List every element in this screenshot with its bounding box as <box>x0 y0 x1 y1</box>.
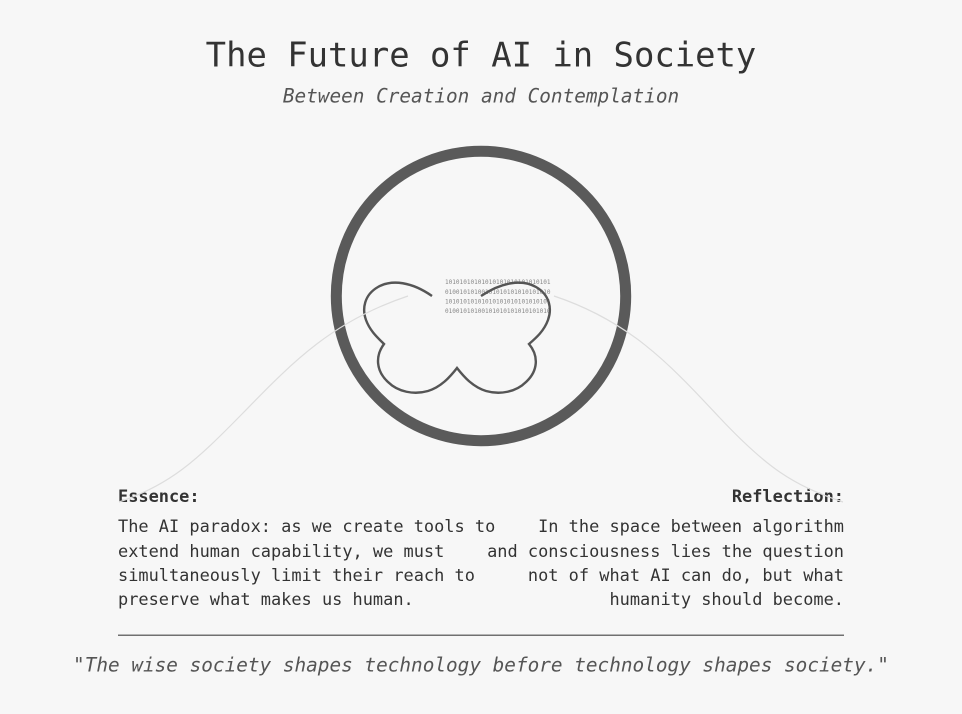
connector: right curve <box>554 296 843 502</box>
binary text block <box>445 279 551 315</box>
text block: reflection: humanity should become. <box>609 589 844 609</box>
divider <box>118 634 844 636</box>
subtitle: Between Creation and Contemplation <box>283 84 679 108</box>
icon: curved brain outline <box>364 283 550 393</box>
icon: large ring <box>336 151 626 441</box>
quote: "The wise society shapes technology before technology shapes society." <box>73 654 889 676</box>
binary text block: 01001010100101010101010101010 <box>445 289 551 296</box>
text block: essence: The AI paradox: as we create tools to <box>118 516 495 536</box>
text block: reflection: and consciousness lies the question <box>487 541 844 561</box>
connector: left curve <box>119 296 408 502</box>
text block: essence <box>118 516 495 609</box>
binary text block: 01001010100101010101010101010 <box>445 308 551 315</box>
heading: reflection: Reflection: <box>732 486 844 506</box>
text block: essence: preserve what makes us human. <box>118 589 414 609</box>
heading: essence: Essence: <box>118 486 200 506</box>
text block: reflection <box>487 516 844 609</box>
text block: essence: simultaneously limit their reach to <box>118 565 475 585</box>
text block: reflection: In the space between algorithm <box>538 516 844 536</box>
binary text block: 10101010101010101010101010101 <box>445 279 551 286</box>
title: The Future of AI in Society <box>206 36 756 74</box>
binary text block: 10101010101010101010101010101 <box>445 298 551 306</box>
text block: essence: extend human capability, we must <box>118 541 444 561</box>
text block: reflection: not of what AI can do, but what <box>528 565 844 585</box>
